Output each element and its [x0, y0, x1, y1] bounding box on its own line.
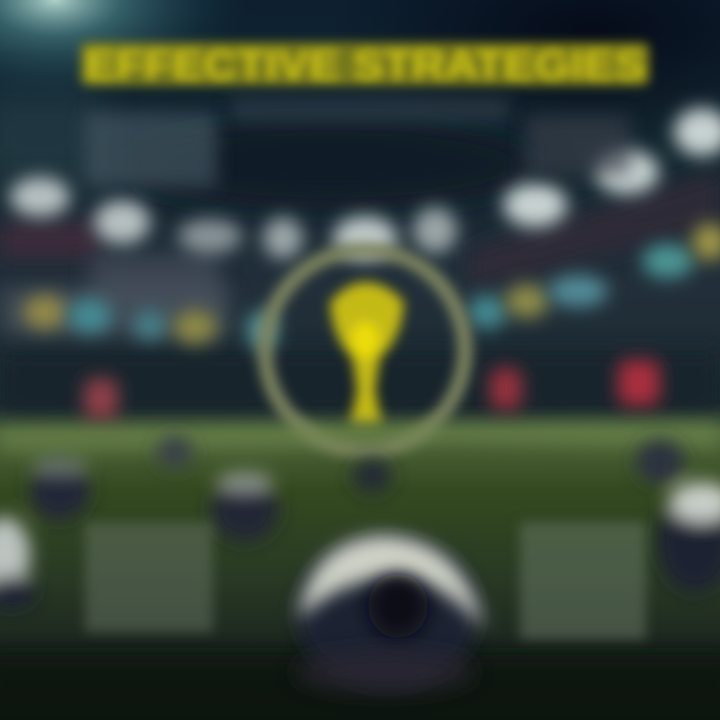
scattered footballs — [0, 436, 720, 608]
text panel: top left — [85, 112, 217, 187]
pitch highlight — [0, 420, 720, 452]
trophy emblem — [265, 250, 465, 450]
stadium stands and coloured banners — [0, 170, 720, 415]
text panel: bottom left — [85, 522, 213, 632]
bottom shadow — [0, 655, 720, 720]
stadium floodlights — [10, 108, 720, 260]
players in red — [84, 360, 660, 420]
subtitle — [230, 98, 510, 122]
ring — [265, 250, 465, 450]
large football — [295, 535, 484, 694]
title: EFFECTIVE STRATEGIES — [85, 41, 645, 88]
text panel: top right — [525, 115, 630, 175]
trophy — [330, 282, 404, 424]
text panel: bottom right — [520, 522, 646, 640]
